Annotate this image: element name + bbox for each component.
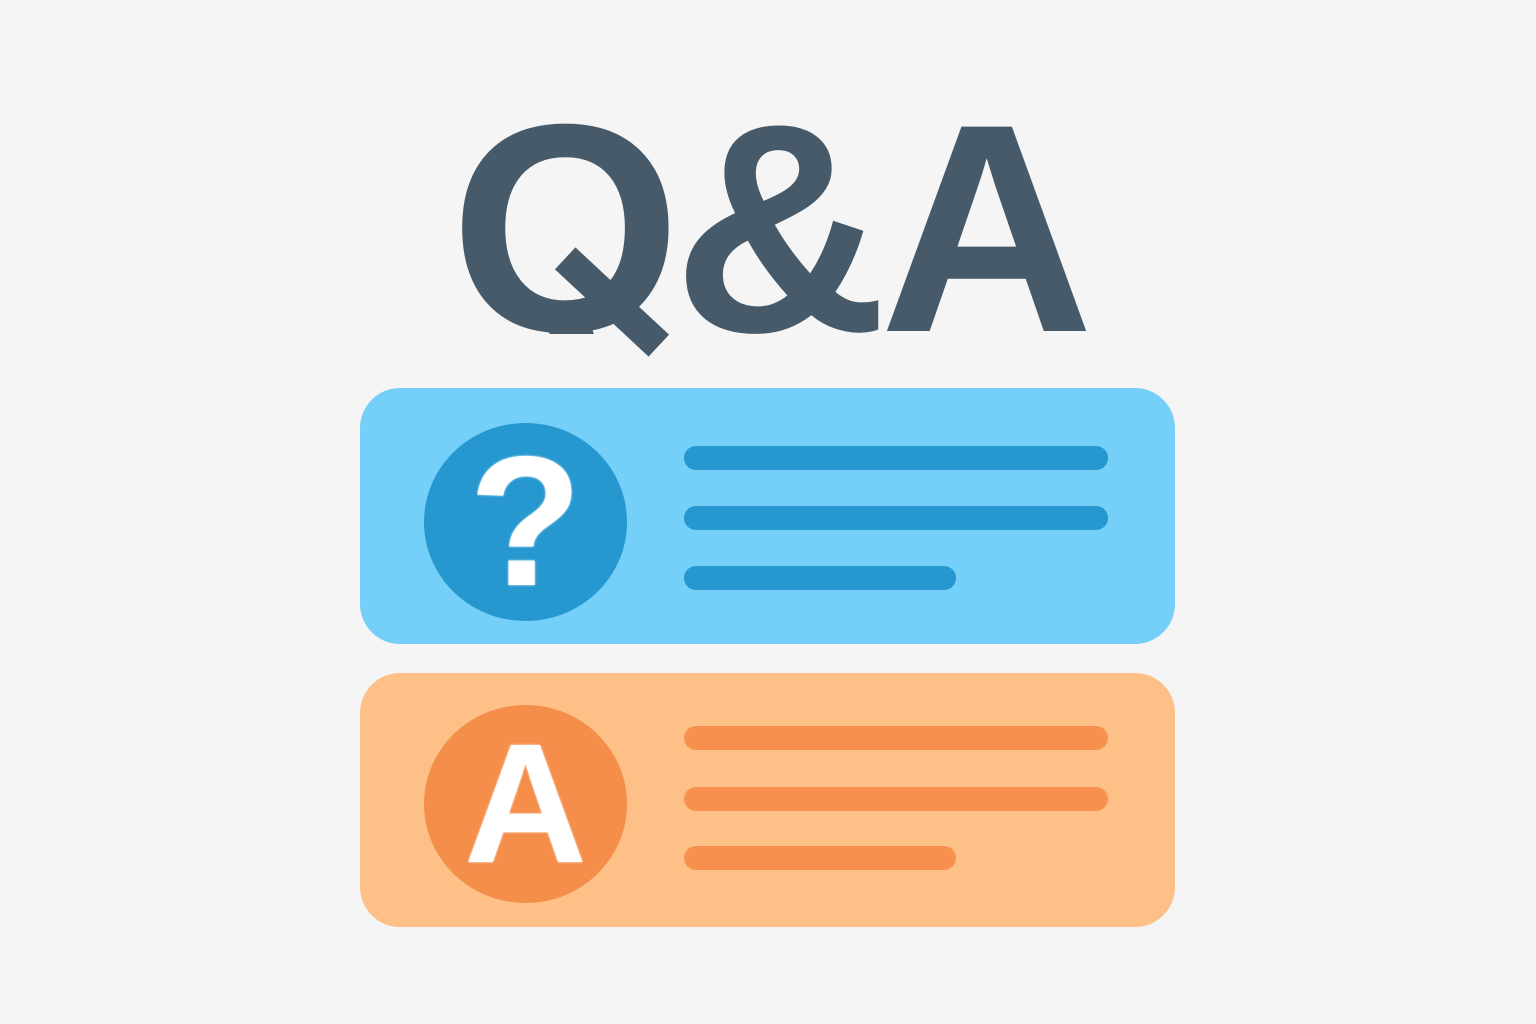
text line 2 [684,506,1108,530]
text line 2 [684,787,1108,811]
panel: question [360,388,1175,644]
panel: answer [360,673,1175,927]
icon: answer A circle: A [464,709,587,899]
Q diagonal tail [555,247,669,357]
icon: answer A circle [424,705,627,903]
icon: question mark circle: ? [469,419,582,625]
icon: question mark circle [424,423,627,621]
text line 1 [684,726,1108,750]
text line 3 [684,566,956,590]
title: Q&A [450,62,1086,394]
title Q tail cover [540,334,665,388]
text line 1 [684,446,1108,470]
text line 3 [684,846,956,870]
